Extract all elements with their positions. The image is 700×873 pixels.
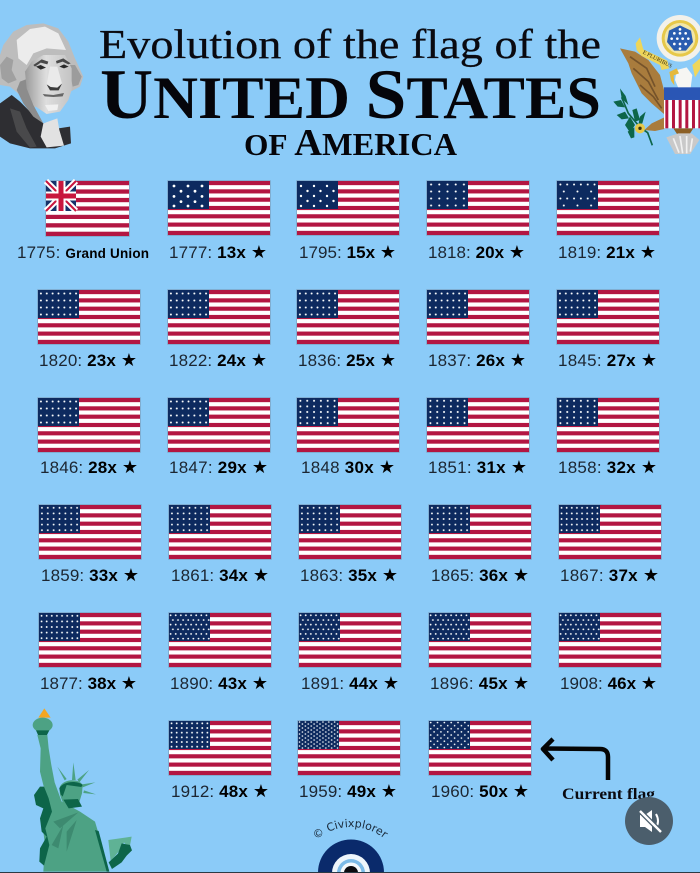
flag cell: 1846: 1846: 28x ★ — [40, 457, 138, 478]
flag cell: 1891: 1891: 44x ★ — [301, 673, 399, 694]
flag cell: 1867: 1867: 37x ★ — [560, 565, 659, 586]
flag cell: 1960 — [428, 720, 532, 802]
flag grid — [17, 180, 662, 802]
flag cell: 1960: 1960: 50x ★ — [431, 781, 529, 802]
flag cell: 1861 — [168, 504, 272, 586]
flag cell: 1795 — [296, 180, 400, 263]
flag cell: 1959 — [297, 720, 401, 802]
logo text: © Civixplorer — [314, 818, 388, 838]
flag cell: 1775 Grand Union — [17, 180, 149, 262]
flag cell: 1858: 1858: 32x ★ — [558, 457, 657, 478]
flag cell: 1851 — [426, 397, 530, 478]
flag cell: 1822 — [167, 289, 271, 371]
flag cell: 1819: 1819: 21x ★ — [558, 242, 656, 263]
flag cell: 1836: 1836: 25x ★ — [298, 350, 396, 371]
flag cell: 1896 — [428, 612, 532, 694]
flag cell: 1845 — [556, 289, 660, 371]
flag cell: 1858 — [556, 397, 660, 478]
flag cell: 1863: 1863: 35x ★ — [300, 565, 398, 586]
arrow: pointing to current flag — [543, 739, 608, 780]
flag cell: 1836 — [296, 289, 400, 371]
flag cell: 1820: 1820: 23x ★ — [39, 350, 137, 371]
olive branch — [613, 88, 652, 145]
ribbon — [636, 37, 669, 70]
flag cell: 1848 — [296, 397, 400, 478]
flag cell: 1795: 1795: 15x ★ — [299, 242, 396, 263]
icon: great seal eagle — [613, 15, 700, 154]
flag cell: 1851: 1851: 31x ★ — [428, 457, 527, 478]
seal glory — [657, 15, 700, 62]
head — [675, 67, 692, 88]
flag cell: 1819 — [556, 180, 660, 263]
flag cell: 1848: 1848 30x ★ — [301, 457, 395, 478]
flag cell: 1891 — [298, 612, 402, 694]
flag cell: 1877 — [38, 612, 142, 694]
flag cell: 1959: 1959: 49x ★ — [299, 781, 397, 802]
flag cell: 1837 — [426, 289, 530, 371]
logo: Civixplorer — [314, 818, 388, 872]
icon: muted speaker — [640, 810, 661, 832]
portrait: George Washington — [0, 23, 83, 148]
logo mark — [318, 840, 384, 873]
illustration: Statue of Liberty — [33, 708, 132, 872]
icon: great seal eagle: E PLURIBUS — [641, 50, 673, 70]
flag cell: 1912 — [168, 720, 272, 802]
title — [99, 21, 601, 164]
title line 3: OF AMERICA — [244, 122, 457, 164]
flag cell: 1818 — [426, 180, 530, 263]
flag cell: 1861: 1861: 34x ★ — [171, 565, 269, 586]
title line 1: Evolution of the flag of the — [99, 21, 601, 67]
flag cell: 1847: 1847: 29x ★ — [169, 457, 268, 478]
flag cell: 1877: 1877: 38x ★ — [40, 673, 137, 694]
flag: Grand Union — [45, 180, 130, 237]
flag cell: 1865: 1865: 36x ★ — [431, 565, 529, 586]
flag cell: 1777 — [167, 180, 271, 263]
text: current flag: Current flag — [562, 786, 655, 803]
flag cell: 1896: 1896: 45x ★ — [430, 673, 529, 694]
flag cell: 1863 — [298, 504, 402, 586]
flag cell: 1890 — [168, 612, 272, 694]
tail — [673, 128, 693, 136]
flag cell: 1846 — [37, 397, 141, 478]
flag cell: 1818: 1818: 20x ★ — [428, 242, 525, 263]
label: 1775: 1775: Grand Union — [17, 243, 149, 262]
wing — [620, 48, 664, 114]
flag cell: 1867 — [558, 504, 662, 586]
bottom edge line — [0, 872, 700, 873]
flag cell: 1859 — [38, 504, 142, 586]
flag cell: 1837: 1837: 26x ★ — [428, 350, 526, 371]
flag cell: 1847 — [167, 397, 271, 478]
flag cell: 1865 — [428, 504, 532, 586]
flag cell: 1822: 1822: 24x ★ — [169, 350, 267, 371]
flag cell: 1777: 1777: 13x ★ — [169, 242, 267, 263]
flag cell: 1912: 1912: 48x ★ — [171, 781, 269, 802]
flag cell: 1820 — [37, 289, 141, 371]
shield — [664, 87, 700, 100]
flag cell: 1845: 1845: 27x ★ — [558, 350, 657, 371]
flag cell: 1890: 1890: 43x ★ — [170, 673, 268, 694]
flag cell: 1908: 1908: 46x ★ — [560, 673, 657, 694]
mute button — [625, 797, 673, 845]
flag cell: 1859: 1859: 33x ★ — [41, 565, 139, 586]
title line 2: UNITED STATES — [100, 56, 601, 134]
flag cell: 1908 — [558, 612, 662, 694]
